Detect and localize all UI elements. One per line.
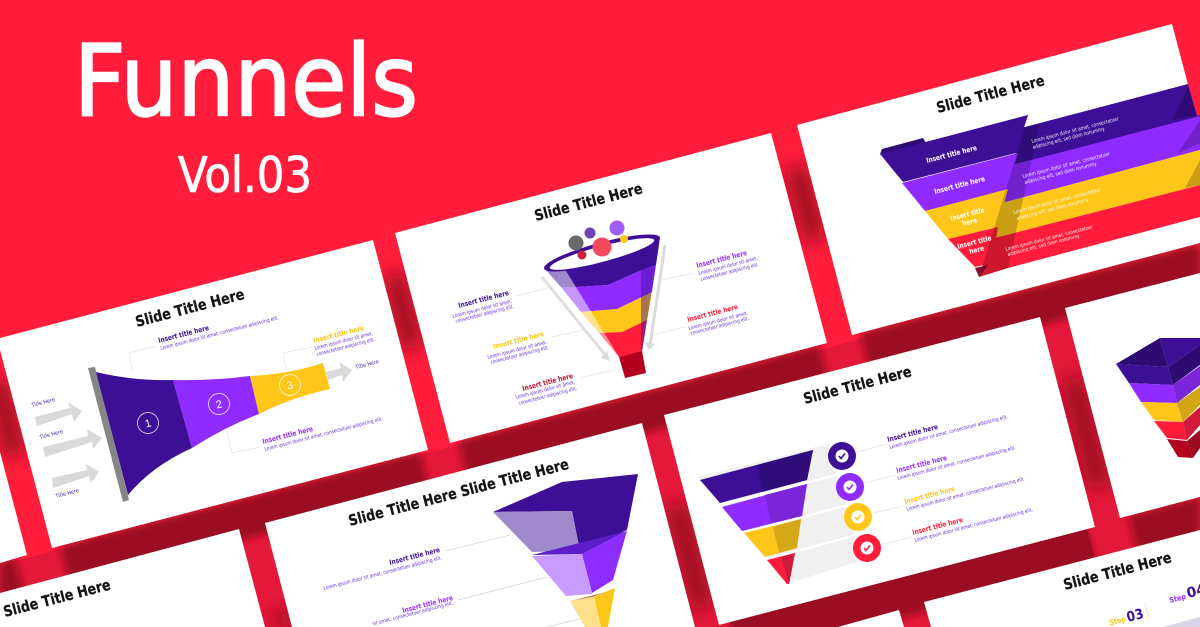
pyramid tier 4 (767, 553, 795, 584)
ribbon body text: adipiscing elit, sed diam nonummy. (1007, 233, 1081, 258)
funnel section 2 (173, 376, 259, 448)
ribbon body text: adipiscing elit, sed diam nonummy. (1024, 161, 1098, 186)
funnel labels: Insert title here (933, 174, 986, 196)
ribbon body text: Lorem ipsum dolor sit amet, consectetuer (1005, 224, 1094, 253)
text block: left 1: Lorem ipsum dolor sit amet, (452, 299, 513, 320)
step 03 label: 03 (1125, 606, 1145, 626)
pyramid tier 1 (700, 450, 813, 503)
text block: left 3 (515, 371, 578, 407)
text block: section 1: Lorem ipsum dolor sit amet, consectetuer adipiscing elit. (160, 315, 280, 352)
funnel graphic (541, 227, 663, 378)
funnel section 3 (250, 363, 330, 414)
3D layered funnel (1116, 338, 1200, 458)
output arrow (326, 362, 352, 382)
funnel labels: here (968, 243, 985, 256)
icon: check badge 2 (836, 473, 864, 501)
funnel labels: Insert title here (925, 143, 978, 165)
main title: Funnels: Funnels (74, 25, 418, 139)
text block: right 1 (695, 248, 760, 283)
text block: section 2 (261, 416, 384, 453)
text block: left 2 (487, 329, 550, 366)
slide title: Slide Title Here (801, 362, 913, 408)
slide title: Slide Title Here (532, 179, 644, 225)
funnel mouth bar (88, 367, 129, 502)
panel: bottom right steps slide (924, 530, 1200, 627)
text block 1: Lorem ipsum dolor sit amet, consectetuer adipiscing elit. (323, 555, 443, 592)
text block 2 (895, 445, 1017, 482)
text block: section 3: Insert title here (312, 323, 365, 345)
fold shading (979, 87, 1200, 277)
text block: right 2 (686, 302, 750, 337)
text block: left 2: Insert title here (492, 329, 545, 351)
step 03 label (1108, 606, 1145, 627)
text block: left 1 (452, 288, 515, 325)
arrow: right flow (645, 245, 665, 350)
funnel labels: Insert title (956, 233, 992, 251)
number badge 2 (208, 394, 230, 414)
number badge 3: 3 (286, 379, 295, 393)
text block 3: Insert title here (903, 484, 956, 506)
icon: check badge 1 (828, 442, 856, 470)
pyramid tier 2 (722, 484, 807, 531)
funnel labels (925, 143, 992, 256)
subtitle: Vol.03: Vol.03 (178, 147, 312, 204)
pyramid tier 3 (744, 519, 801, 557)
text block: left 1: Insert title here (457, 288, 510, 310)
panel: bottom left slide (0, 529, 265, 627)
text block: section 2: Lorem ipsum dolor sit amet, consectetuer adipiscing elit. (264, 416, 384, 453)
grey backdrop (698, 444, 863, 583)
panel: far left slide fragment (0, 452, 27, 563)
funnel labels: here (961, 215, 978, 228)
slide title: Slide Title Here (1061, 548, 1173, 594)
slide title: Slide Title Here (1, 576, 112, 621)
text block: section 2: Insert title here (261, 424, 314, 446)
arrow: left flow (542, 277, 610, 361)
text block: right 1: Lorem ipsum dolor sit amet, (698, 256, 759, 277)
text block: section 3 (312, 323, 376, 358)
text block: section 3: Lorem ipsum dolor sit amet, (314, 331, 374, 352)
number badge 1: 1 (144, 417, 153, 431)
input arrow 3 (52, 464, 99, 488)
panel: classic funnel slide (395, 133, 827, 443)
ribbon body text (1005, 116, 1120, 258)
text block: left 1: consectetuer adipiscing elit. (455, 304, 515, 325)
text block 1: Insert title here (388, 545, 441, 567)
text block 2: Insert title here (895, 453, 948, 475)
panel: pyramid list slide (664, 317, 1095, 625)
number badge 2: 2 (215, 398, 224, 412)
panel: horizontal funnel slide (0, 240, 428, 548)
text block 4: Insert title here (911, 515, 964, 537)
panel: far right layered pyramid slide (1065, 273, 1200, 518)
panel: 3D funnel slide (265, 423, 695, 627)
3D funnel tier 2 (532, 531, 627, 596)
text block: right 1: Insert title here (695, 248, 748, 270)
icon: check badge 4 (853, 534, 881, 562)
text block: section 3: consectetuer adipiscing elit. (316, 337, 376, 358)
input arrow 1 (35, 402, 82, 426)
icon: check badge 3 (844, 503, 872, 531)
text block 3: Lorem ipsum dolor sit amet, consectetuer adipiscing elit. (906, 476, 1026, 513)
step 04 label (1168, 581, 1200, 605)
number badge 3 (280, 374, 300, 396)
ribbon body text: adipiscing elit, sed diam nonummy. (1032, 126, 1106, 151)
text block 1: Insert title here (886, 422, 939, 444)
text block: section 1 (157, 315, 280, 352)
panel: ribbon funnel slide (797, 24, 1200, 335)
labels: Title Here (38, 429, 64, 441)
step 04 label: Step (1168, 592, 1187, 605)
text block: right 2: Lorem ipsum dolor sit amet, (688, 311, 749, 332)
ribbon body text: adipiscing elit, sed diam nonummy. (1016, 197, 1090, 222)
funnel labels: Insert title (949, 205, 985, 223)
text block 1 (886, 414, 1009, 451)
text block 3 (903, 476, 1026, 513)
slide title: Slide Title Here Slide Title Here (346, 455, 571, 530)
slide title: Slide Title Here (934, 71, 1046, 117)
text block: left 3: Lorem ipsum dolor sit amet, (515, 380, 576, 401)
panel: bottom centre slide fragment (838, 610, 904, 627)
number badge 1 (138, 412, 158, 434)
ribbon body text: Lorem ipsum dolor sit amet, consectetuer (1031, 116, 1120, 145)
funnel section 1 (96, 372, 192, 495)
text block: section 1: Insert title here (157, 323, 210, 345)
labels: Title Here (354, 359, 380, 371)
text block 4 (911, 507, 1034, 544)
text block: left 3: consectetuer adipiscing elit. (518, 386, 578, 407)
ribbon body text: Lorem ipsum dolor sit amet, consectetuer (1013, 187, 1102, 216)
input arrow 2 (43, 429, 102, 457)
balls (568, 220, 628, 260)
step chart fragment (1163, 617, 1200, 627)
text block: left 3: Insert title here (521, 371, 574, 393)
labels: Title Here (30, 397, 56, 409)
right ribbon bands (979, 84, 1200, 277)
text block: left 2: Lorem ipsum dolor sit amet, (487, 340, 548, 361)
text block 2: Lorem ipsum dolor sit amet, consectetuer adipiscing elit. (897, 445, 1017, 482)
slide title: Slide Title Here (133, 285, 246, 331)
text block: right 2: Insert title here (686, 302, 739, 324)
labels (30, 359, 380, 500)
text block 4: Lorem ipsum dolor sit amet, consectetuer adipiscing elit. (914, 507, 1034, 544)
text block 1: Lorem ipsum dolor sit amet, consectetuer adipiscing elit. (889, 414, 1009, 451)
text block 2: sit amet, consectetuer adipiscing elit. (372, 601, 454, 627)
text block 2: Insert title here (401, 593, 454, 615)
left funnel pieces (880, 115, 1028, 277)
ribbon body text: Lorem ipsum dolor sit amet, consectetuer (1022, 151, 1111, 180)
3D funnel tier 3 (570, 588, 615, 627)
text block: right 1: consectetuer adipiscing elit. (700, 262, 760, 283)
text block: right 2: consectetuer adipiscing elit. (690, 316, 750, 337)
text block: left 2: consectetuer adipiscing elit. (490, 345, 550, 366)
labels: Title Here (54, 488, 80, 500)
3D funnel tier 1 (493, 474, 638, 552)
